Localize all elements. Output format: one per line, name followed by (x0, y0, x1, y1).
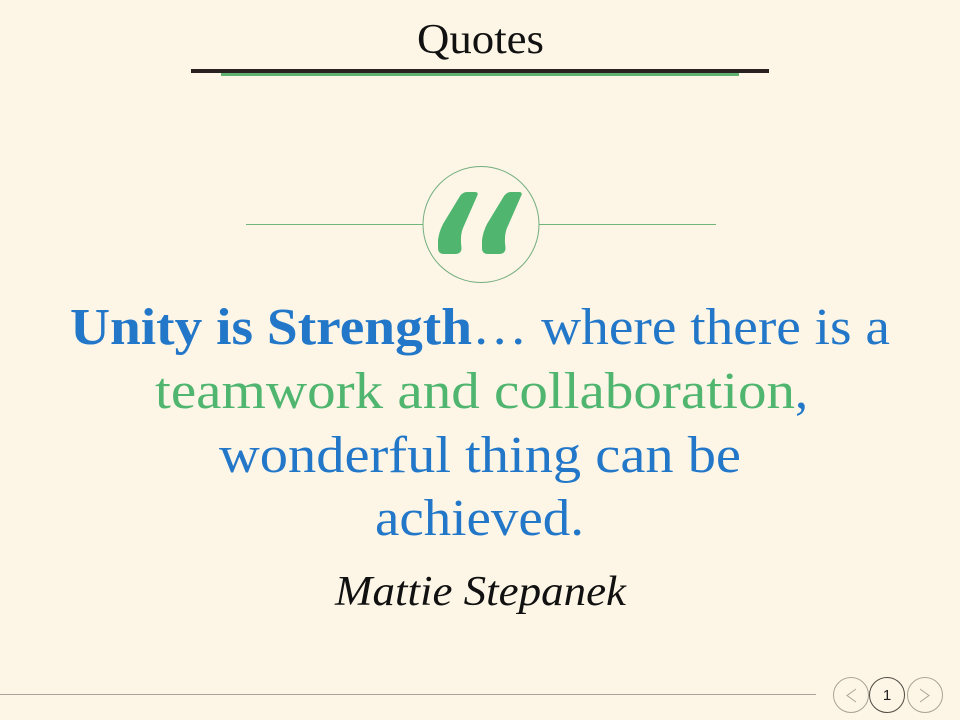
title: Quotes (417, 17, 544, 63)
quote text: Unity is Strength (70, 299, 472, 356)
quote text: achieved. (375, 490, 584, 547)
quote text: wonderful thing can be (219, 427, 741, 484)
footer line (0, 694, 816, 696)
attribution: Mattie Stepanek (334, 569, 627, 615)
quote text (70, 299, 890, 547)
page number: 1 (883, 687, 891, 704)
previous button (834, 678, 868, 712)
page number (870, 678, 904, 712)
quote text: , (795, 363, 808, 420)
next button (908, 678, 942, 712)
quote icon (246, 166, 716, 282)
quote text: … where there is a (472, 299, 890, 356)
quote text: teamwork and collaboration (155, 363, 795, 420)
title underline (191, 69, 769, 76)
